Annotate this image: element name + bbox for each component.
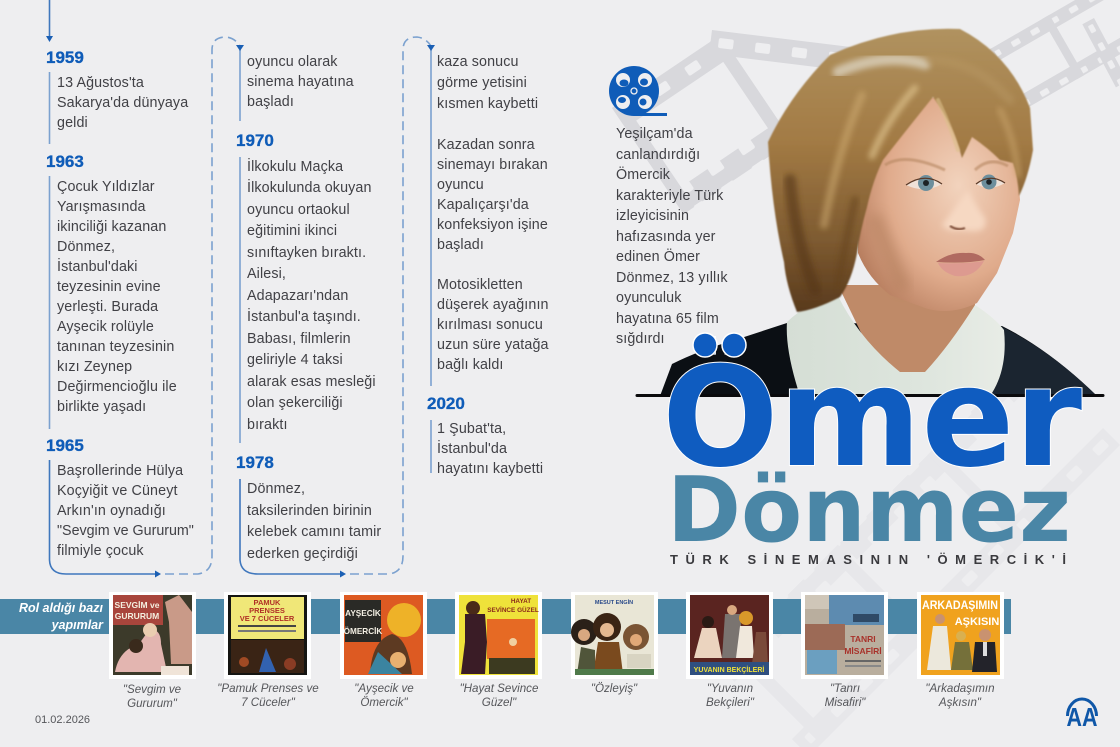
intro text: Yeşilçam'da: [616, 126, 693, 142]
text 1970: İstanbul'a taşındı.: [247, 307, 361, 325]
intro text: sığdırdı: [616, 331, 665, 347]
poster: Sevgim ve Gururum: GURURUM: [115, 611, 159, 621]
poster: Tanrı Misafiri: [801, 592, 888, 679]
text after accident: başladı: [437, 237, 484, 253]
captions: Güzel": [482, 696, 517, 709]
text 1965: Başrollerinde Hülya: [57, 463, 183, 479]
text 1963: teyzesinin evine: [57, 279, 161, 295]
text 1965: [57, 463, 194, 559]
text motorcycle: bağlı kaldı: [437, 357, 504, 373]
text continued: [247, 54, 354, 110]
poster: Sevgim ve Gururum: [109, 592, 196, 679]
poster: Yuvanın Bekçileri: [686, 592, 773, 679]
captions: Misafiri": [825, 696, 866, 709]
captions: [123, 682, 995, 710]
text continued: sinema hayatına: [247, 74, 354, 90]
text 1970: Adapazarı'ndan: [247, 288, 348, 304]
text 1963: kızı Zeynep: [57, 359, 132, 375]
text continued: kaza sonucu: [437, 54, 519, 70]
intro text: Dönmez, 13 yıllık: [616, 270, 728, 286]
timeline connector lines: [46, 0, 435, 578]
photo: Ömer Dönmez portrait: [660, 29, 1097, 396]
text 1963: Çocuk Yıldızlar: [57, 179, 155, 195]
text 1959: Sakarya'da dünyaya: [57, 95, 188, 111]
black rule under photo: [637, 394, 1103, 397]
poster: Tanrı Misafiri: MİSAFİRİ: [844, 646, 882, 656]
text 1970: geliriyle 4 taksi: [247, 352, 343, 368]
text continued: [437, 54, 538, 112]
text after accident: Kazadan sonra: [437, 137, 535, 153]
text 1963: birlikte yaşadı: [57, 399, 146, 415]
text continued: kısmen kaybetti: [437, 96, 538, 112]
text 1970: [247, 157, 376, 433]
text 1970: eğitimini ikinci: [247, 223, 337, 239]
text 2020: [437, 421, 543, 477]
poster: Pamuk Prenses: PAMUK: [254, 598, 281, 607]
text 1963: ikinciliği kazanan: [57, 219, 166, 235]
intro text: canlandırdığı: [616, 147, 700, 163]
title: Ömer: Ömer: [662, 337, 1082, 498]
poster: Özleyiş: [571, 592, 658, 679]
text after accident: sinemayı bırakan: [437, 157, 548, 173]
text 1970: olan şekerciliği: [247, 395, 343, 411]
poster: Yuvanın Bekçileri: YUVANIN BEKÇİLERİ: [694, 666, 764, 674]
intro text: izleyicisinin: [616, 208, 689, 224]
text 1963: Değirmencioğlu ile: [57, 379, 177, 395]
text after accident: [437, 137, 548, 253]
text after accident: oyuncu: [437, 177, 484, 193]
captions: Ömercik": [360, 696, 409, 709]
timeline column 3: [427, 54, 549, 477]
poster: Ayşecik ve Ömercik: ÖMERCİK: [344, 626, 382, 636]
text 1959: geldi: [57, 115, 88, 131]
captions: "Yuvanın: [707, 682, 753, 695]
text 1965: "Sevgim ve Gururum": [57, 523, 194, 539]
intro text: oyunculuk: [616, 290, 682, 306]
text continued: oyuncu olarak: [247, 54, 338, 70]
text motorcycle: düşerek ayağının: [437, 297, 549, 313]
text 1963: Dönmez,: [57, 239, 115, 255]
text 1970: oyuncu ortaokul: [247, 202, 350, 218]
year 1970: 1970: [236, 131, 274, 150]
text 1970: Babası, filmlerin: [247, 331, 351, 347]
text 1965: filmiyle çocuk: [57, 543, 144, 559]
band: films: [0, 599, 1011, 634]
text motorcycle: uzun süre yatağa: [437, 337, 549, 353]
year 1965: 1965: [46, 436, 84, 455]
text 2020: hayatını kaybetti: [437, 461, 543, 477]
poster: Tanrı Misafiri: TANRI: [850, 634, 876, 644]
text 1959: 13 Ağustos'ta: [57, 75, 144, 91]
text 1963: İstanbul'daki: [57, 257, 138, 275]
captions: "Tanrı: [830, 682, 860, 695]
poster: Arkadaşımın Aşkısın: ARKADAŞIMIN: [922, 598, 998, 612]
text continued: görme yetisini: [437, 75, 527, 91]
text 1965: Koçyiğit ve Cüneyt: [57, 483, 178, 499]
captions: "Pamuk Prenses ve: [217, 682, 319, 695]
timeline column 2: [236, 54, 381, 562]
intro text: hafızasında yer: [616, 229, 716, 245]
year 1978: 1978: [236, 453, 274, 472]
poster: Ayşecik ve Ömercik: [340, 592, 427, 679]
poster: Pamuk Prenses: VE 7 CÜCELER: [240, 614, 295, 623]
text 2020: 1 Şubat'ta,: [437, 421, 506, 437]
poster: Ayşecik ve Ömercik: AYŞECİK: [345, 608, 381, 618]
band label: yapımlar: [51, 618, 104, 632]
captions: 7 Cüceler": [241, 696, 296, 709]
text 1963: Yarışmasında: [57, 199, 146, 215]
text motorcycle: Motosikletten: [437, 277, 523, 293]
intro text: hayatına 65 film: [616, 311, 719, 327]
film strip background: [612, 0, 1120, 747]
text 1970: İlkokulunda okuyan: [247, 178, 372, 196]
text 1963: yerleşti. Burada: [57, 299, 158, 315]
text 1978: kelebek camını tamir: [247, 524, 381, 540]
text 1978: ederken geçirdiği: [247, 546, 358, 562]
captions: Aşkısın": [938, 696, 982, 709]
captions: Gururum": [127, 697, 178, 710]
timeline column 1: [46, 48, 194, 559]
intro text: edinen Ömer: [616, 247, 700, 265]
text after accident: Kapalıçarşı'da: [437, 197, 529, 213]
text 1963: tanınan teyzesinin: [57, 339, 174, 355]
poster: Arkadaşımın Aşkısın: [917, 592, 1004, 679]
text 1970: İlkokulu Maçka: [247, 157, 343, 175]
year 1963: 1963: [46, 152, 84, 171]
poster: Arkadaşımın Aşkısın: AŞKISIN: [955, 616, 999, 628]
poster: Hayat Sevince Güzel: HAYAT: [511, 598, 531, 605]
intro text: Ömercik: [616, 165, 671, 183]
poster: Sevgim ve Gururum: SEVGİM ve: [115, 600, 160, 610]
year 1959: 1959: [46, 48, 84, 67]
text 1978: [247, 481, 381, 562]
text 1970: sınıftayken bıraktı.: [247, 245, 366, 261]
text 1963: Ayşecik rolüyle: [57, 319, 154, 335]
intro text: [616, 126, 728, 347]
text 1970: bıraktı: [247, 417, 288, 433]
text 1959: [57, 75, 188, 131]
captions: "Sevgim ve: [123, 683, 182, 696]
captions: "Özleyiş": [591, 682, 638, 695]
title: Dönmez: Dönmez: [667, 458, 1071, 563]
text 2020: İstanbul'da: [437, 439, 507, 457]
poster: Hayat Sevince Güzel: [455, 592, 542, 679]
band label: Rol aldığı bazı: [19, 601, 104, 615]
text motorcycle: kırılması sonucu: [437, 317, 543, 333]
band label: [19, 601, 104, 632]
AA logo: AA: [1066, 702, 1098, 732]
captions: "Hayat Sevince: [460, 682, 539, 695]
captions: "Arkadaşımın: [925, 682, 995, 695]
text 1978: Dönmez,: [247, 481, 305, 497]
facial features: [875, 160, 1008, 290]
captions: Bekçileri": [706, 696, 755, 709]
poster: Hayat Sevince Güzel: SEVİNCE GÜZEL: [487, 605, 539, 614]
text 1965: Arkın'ın oynadığı: [57, 503, 166, 519]
text after accident: konfeksiyon işine: [437, 217, 548, 233]
text 1970: alarak esas mesleği: [247, 374, 376, 390]
text 1978: taksilerinden birinin: [247, 503, 372, 519]
subtitle: TÜRK SİNEMASININ 'ÖMERCİK'İ: [670, 552, 1066, 567]
poster: Pamuk Prenses: [224, 592, 311, 679]
text 1970: Ailesi,: [247, 266, 286, 282]
text motorcycle: [437, 277, 549, 373]
poster: Özleyiş: MESUT ENGİN: [595, 599, 633, 606]
intro text: karakteriyle Türk: [616, 188, 724, 204]
year 2020: 2020: [427, 394, 465, 413]
text 1963: [57, 179, 177, 415]
captions: "Ayşecik ve: [354, 682, 414, 695]
text continued: başladı: [247, 94, 294, 110]
date: 01.02.2026: [35, 714, 90, 726]
poster row: [109, 592, 1004, 679]
icon: film reel: [609, 66, 667, 116]
poster: Pamuk Prenses: PRENSES: [249, 606, 285, 615]
